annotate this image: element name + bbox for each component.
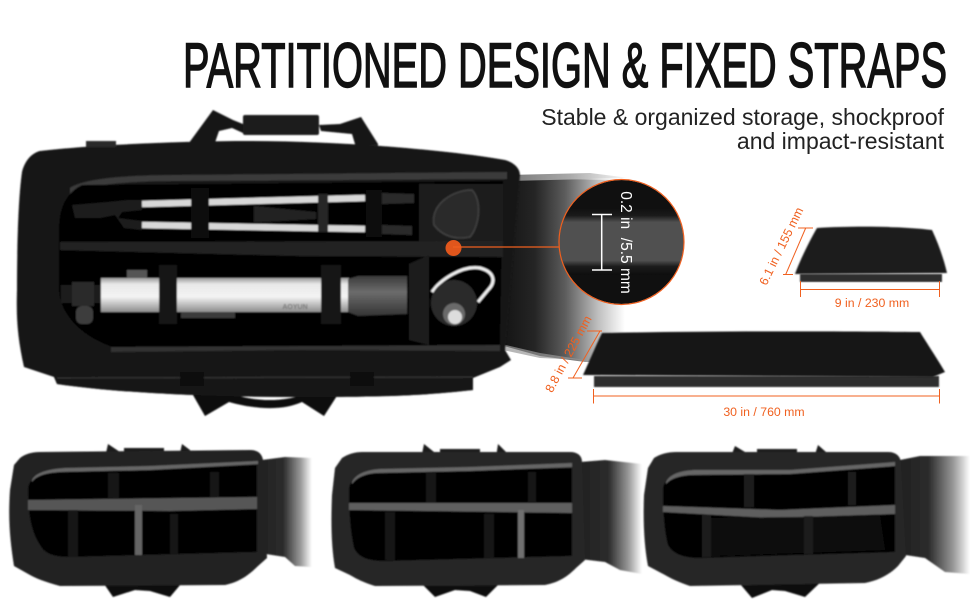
bag layout 3 [644, 445, 970, 598]
dimension: 8.8 in / 225 mm: 8.8 in / 225 mm [542, 313, 595, 395]
bag layout 1 [9, 444, 312, 597]
open flap of main bag [497, 173, 640, 362]
cavity [59, 181, 503, 347]
bag body [17, 141, 520, 397]
subtitle: and impact-resistant [737, 128, 945, 154]
zoom circle: 5.5 mm thickness: 0.2 in /5.5 mm [617, 191, 634, 294]
telescope [61, 265, 407, 324]
lid shading [70, 172, 507, 194]
callout marker [446, 240, 559, 256]
main bag with telescope [17, 110, 520, 416]
bag layout 2 [331, 444, 642, 597]
dimension: 9 in / 230 mm: 9 in / 230 mm [835, 296, 909, 310]
subtitle [541, 104, 945, 154]
dimension: 6.1 in / 155 mm: 6.1 in / 155 mm [757, 205, 806, 287]
dimension: 30 in / 760 mm: 30 in / 760 mm [723, 405, 805, 419]
dimension: 30 in / 760 mm [594, 389, 940, 419]
tripod [72, 188, 414, 238]
side pouch [409, 255, 429, 345]
subtitle: Stable & organized storage, shockproof [541, 104, 945, 130]
small divider pad [757, 205, 947, 310]
bottom handles [181, 374, 351, 416]
mask pouch [419, 184, 503, 242]
large divider pad [542, 313, 945, 419]
divider shelf [60, 241, 503, 257]
telescope: AOYUN [282, 304, 308, 311]
dimension: 9 in / 230 mm [800, 281, 940, 310]
water bottle [431, 268, 493, 326]
zoom circle: 5.5 mm thickness [559, 180, 685, 304]
top handle [186, 110, 378, 161]
